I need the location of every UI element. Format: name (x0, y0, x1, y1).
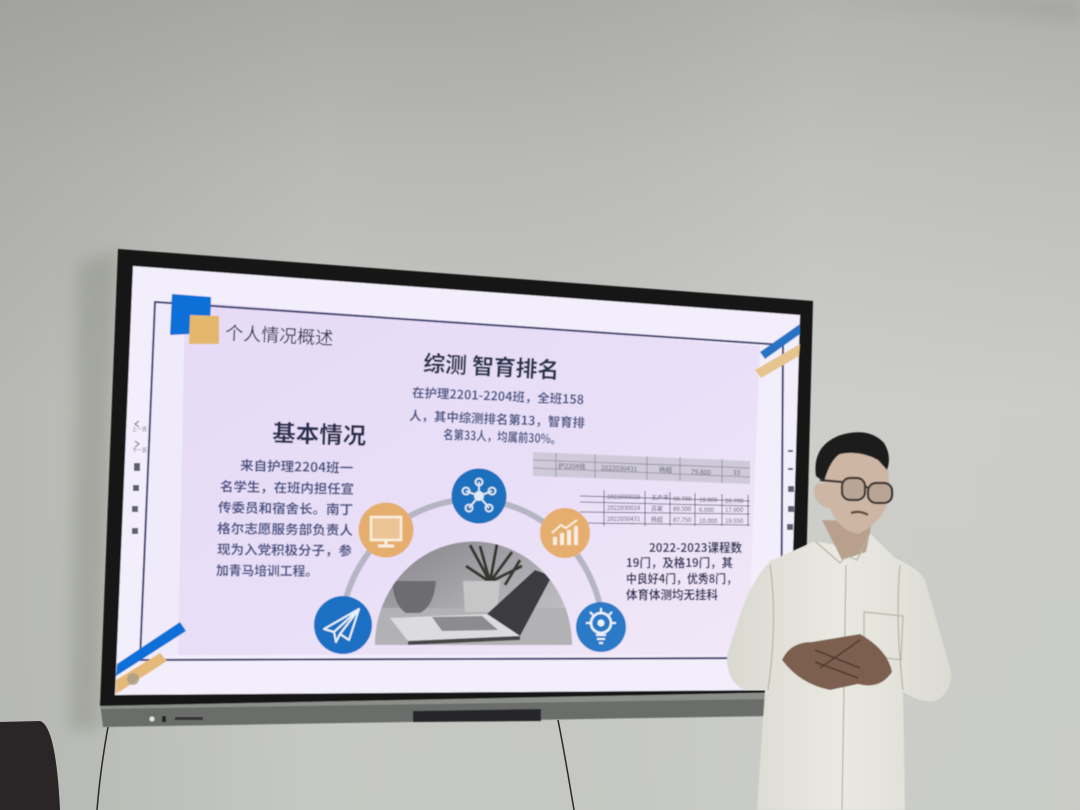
shirt (727, 533, 951, 810)
display (100, 249, 813, 727)
icon: light bulb (576, 602, 626, 652)
text block: course summary: 体育体测均无挂科 (626, 586, 718, 603)
table: course screenshot: 19.550 (725, 516, 744, 525)
table: course screenshot: 10.000 (699, 495, 718, 504)
display bezel (100, 249, 813, 706)
table: course screenshot (580, 490, 750, 526)
text block: ranking description: 人，其中综测排名第13，智育排 (409, 405, 586, 431)
text block: basic info description: 传委员和宿舍长。南丁 (218, 497, 353, 518)
icon: monitor (358, 502, 414, 558)
laptop base (390, 614, 520, 641)
cup (392, 581, 436, 613)
table: ranking screenshot: 护2204班 (558, 460, 586, 471)
heading: slide title: 个人情况概述 (225, 319, 334, 351)
mouth (851, 512, 868, 515)
presenter (727, 432, 951, 810)
slide frame (140, 302, 783, 660)
text block: basic info description: 加青马培训工程。 (216, 560, 318, 580)
text block: basic info description: 来自护理2204班一 (240, 455, 353, 477)
neck (822, 520, 872, 560)
table: course screenshot: 87.750 (673, 515, 692, 524)
text block: course summary: 中良好4门，优秀8门， (626, 570, 737, 587)
table: ranking screenshot (533, 452, 750, 484)
text block: course summary: 2022-2023课程数 (649, 539, 742, 556)
heading: basic info: 基本情况 (272, 414, 367, 451)
table: course screenshot: 90.700 (673, 494, 692, 503)
table: ranking screenshot: 2022030431 (601, 462, 638, 473)
laptop screen (487, 570, 552, 636)
text block: basic info description: 现为入党积极分子，参 (217, 539, 352, 559)
photo: laptop and plant (374, 541, 572, 646)
text block: ranking description (409, 382, 586, 448)
text block: ranking description: 在护理2201-2204班，全班158 (412, 382, 584, 408)
icon: paper plane (314, 596, 372, 654)
table: course screenshot: 6.000 (699, 505, 715, 514)
display screen (115, 266, 800, 695)
hands (782, 634, 892, 690)
table: course screenshot: 王产平 (651, 493, 669, 502)
hair (815, 432, 889, 482)
corner stripes bottom left (116, 622, 186, 694)
text block: course summary: 19门，及格19门，其 (626, 554, 733, 571)
cables under display (97, 720, 574, 810)
table: course screenshot: 2022030431 (607, 514, 640, 523)
table: course screenshot: 苏家 (651, 504, 663, 513)
slide content (116, 294, 800, 694)
table: course screenshot: 2022030029 (607, 492, 640, 501)
glasses (820, 478, 892, 503)
table: course screenshot: 10.000 (699, 516, 718, 525)
slide inner panel (158, 300, 760, 655)
corner stripes top right (755, 324, 800, 378)
arc connector (343, 500, 601, 610)
table: course screenshot: 杨超 (651, 515, 663, 524)
table: ranking screenshot: 杨超 (659, 464, 673, 474)
table: course screenshot: 17.900 (725, 505, 744, 514)
text block: course summary (626, 539, 742, 603)
slide side panel shade (140, 302, 185, 660)
table: ranking screenshot: 79.800 (691, 466, 712, 477)
heading: ranking: 综测 智育排名 (423, 346, 560, 385)
text block: basic info description (216, 455, 354, 580)
icon: network (452, 468, 506, 524)
display lower bar (100, 693, 772, 727)
text block: basic info description: 名学生，在班内担任宣 (220, 476, 354, 498)
trousers (760, 796, 790, 810)
table: course screenshot: 20.700 (725, 496, 744, 505)
shirt details (768, 533, 903, 810)
whiteboard side toolbar left (132, 421, 147, 534)
head (814, 432, 892, 534)
text block: basic info description: 格尔志愿服务部负责人 (217, 518, 353, 539)
table: ranking screenshot: 33 (733, 467, 741, 477)
whiteboard side toolbar left: 上一页 (132, 426, 147, 433)
text block: ranking description: 名第33人，均属前30%。 (443, 424, 561, 448)
whiteboard side toolbar right (787, 450, 794, 530)
icon: growth chart (540, 508, 590, 558)
icon: corner squares (170, 294, 219, 344)
plant (466, 544, 522, 585)
table: course screenshot: 2022030024 (607, 503, 641, 512)
table: course screenshot: 89.500 (673, 504, 692, 513)
chair back (0, 721, 60, 810)
whiteboard side toolbar left: 下一页 (132, 447, 147, 454)
